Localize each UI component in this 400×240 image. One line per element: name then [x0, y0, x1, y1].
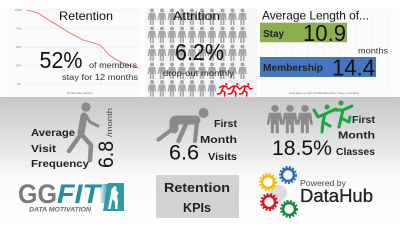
icon: walking person [69, 102, 98, 160]
chart: retention curve [15, 8, 139, 95]
text: label: First [352, 115, 376, 126]
chart: retention curve: 25% [16, 64, 22, 68]
bar: membership [260, 54, 376, 80]
axis label: Average Length of Membership / Stay (months) [289, 91, 359, 95]
bar: membership: 14.4 [332, 54, 375, 80]
icon: red runners [218, 83, 252, 96]
text: label: Average [31, 127, 75, 139]
text: drop-out monthly: drop-out monthly [163, 69, 234, 78]
panel: attrition [145, 8, 257, 97]
text: label: Visits [208, 152, 237, 163]
kpi: average visit frequency [31, 102, 118, 170]
panel: retention [7, 8, 140, 97]
icon: gears [260, 167, 297, 217]
bar: stay: 10.9 [303, 20, 346, 46]
stat: 6.6: 6.6 [169, 142, 199, 164]
text: months: months [358, 46, 388, 56]
logo: GGFIT: DATA MOTIVATION [29, 206, 91, 214]
bar: stay [260, 20, 347, 46]
icon: grey people [267, 105, 313, 133]
logo: GGFIT: FIT [57, 179, 103, 209]
text: label: First [214, 119, 238, 130]
stat: 6.8 per month [95, 108, 118, 168]
icon: crouching person [158, 108, 208, 141]
chart: retention curve: 50% [16, 45, 22, 49]
stat: 6.8 per month: /month [105, 108, 114, 137]
bar: membership: Membership [263, 63, 323, 74]
icon: green dancers [314, 100, 352, 132]
chart: retention curve: 100% [15, 8, 23, 12]
heading: Attrition: Attrition [173, 9, 220, 23]
stat: 52%: 52% [40, 47, 82, 73]
text: label [200, 119, 238, 163]
box: Retention KPIs: KPIs [183, 200, 211, 215]
heading: Retention: Retention [59, 9, 113, 23]
heading: Average Length of...: Average Length of... [262, 8, 369, 22]
text: label: Classes [336, 147, 375, 158]
text: DataHub: DataHub [300, 186, 373, 206]
panel: average length [260, 8, 393, 97]
text: label: Month [338, 130, 375, 142]
text: label [31, 127, 89, 170]
kpi: first month visits [158, 108, 238, 164]
stat: 6.2%: 6.2% [175, 39, 224, 65]
text: Powered by: Powered by [300, 179, 346, 188]
pictogram: members [148, 8, 247, 96]
logo: GGFIT: GG [18, 179, 57, 209]
chart: retention curve: 75% [16, 26, 22, 30]
logo: GGFIT [18, 179, 124, 214]
box: Retention KPIs: Retention [164, 180, 230, 195]
bar: stay: Stay [263, 28, 284, 40]
text: label: Month [200, 135, 237, 146]
chart: retention curve: Months After Joining [67, 91, 93, 95]
kpi: first month classes [267, 100, 376, 160]
text: of members: of members [89, 60, 137, 70]
text: label: Visit [31, 143, 57, 155]
chart: retention curve: 0% [17, 82, 22, 86]
text: stay for 12 months: stay for 12 months [62, 72, 138, 82]
background band [0, 97, 400, 225]
text: label: Frequency [31, 158, 89, 170]
box: Retention KPIs [156, 175, 239, 218]
stat: 6.8 per month: 6.8 [95, 141, 118, 168]
logo: DataHub [260, 167, 373, 217]
stat: 18.5%: 18.5% [272, 137, 332, 160]
text: label [336, 115, 376, 158]
